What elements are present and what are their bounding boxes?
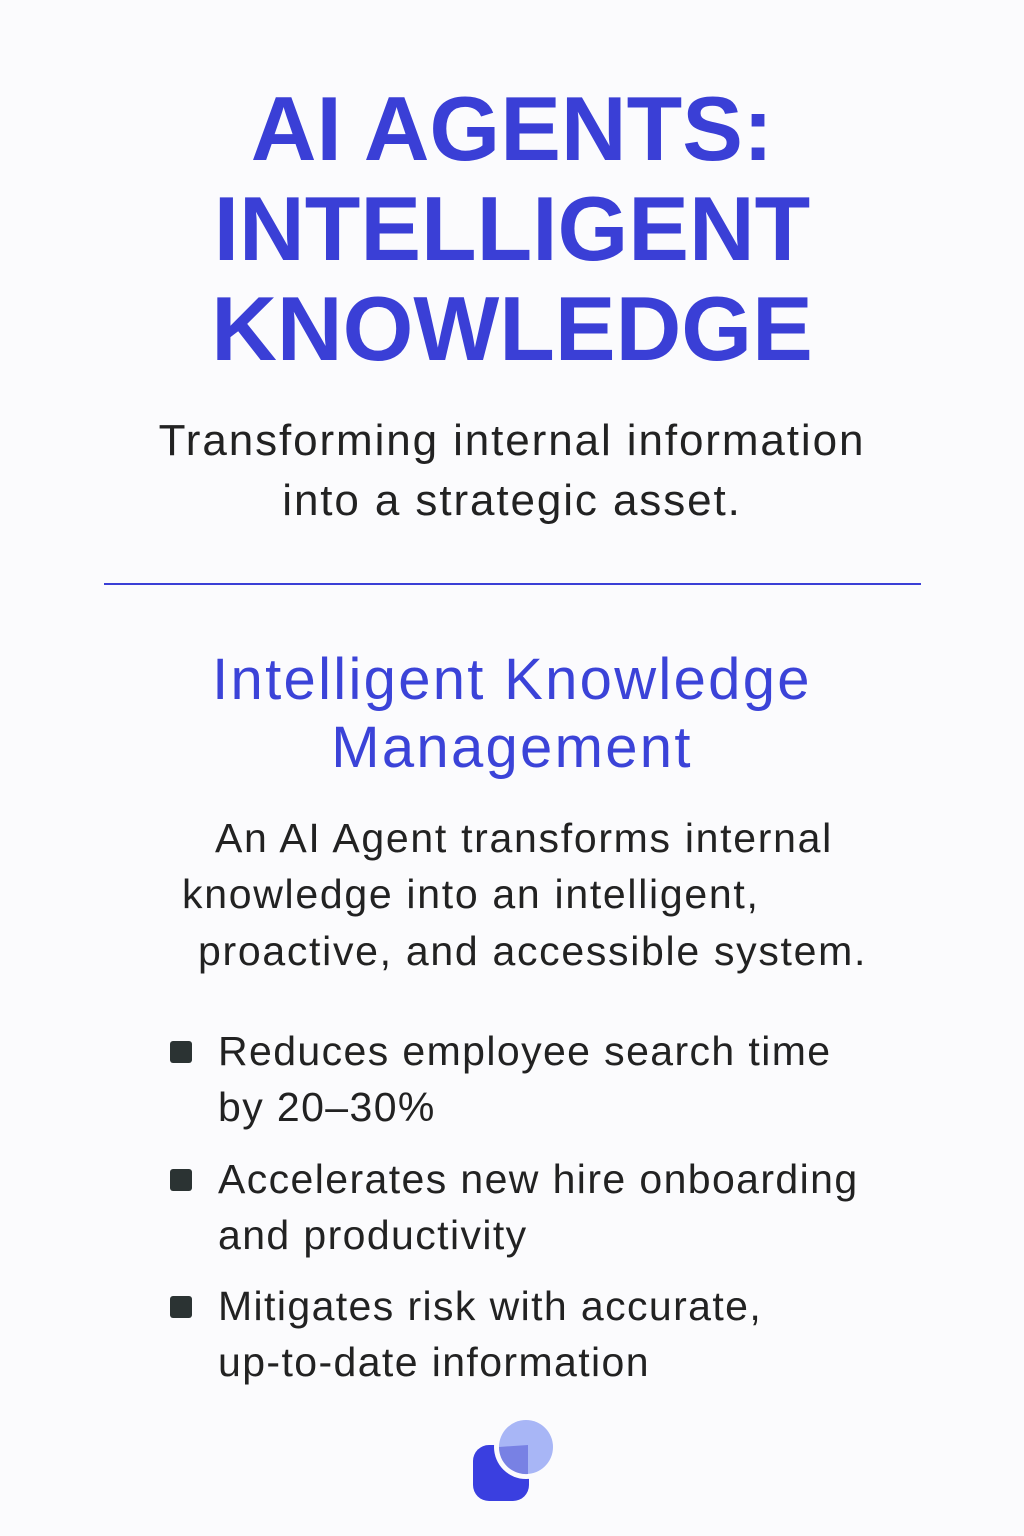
subtitle: Transforming internal information: [159, 416, 865, 465]
subtitle: [159, 416, 865, 525]
section heading: [212, 647, 812, 780]
description paragraph: An AI Agent transforms internal: [215, 815, 833, 861]
bullet 3: up-to-date information: [218, 1339, 650, 1385]
bullet 1: by 20–30%: [218, 1084, 436, 1130]
bullet 1: [170, 1028, 831, 1130]
bullet 1: Reduces employee search time: [218, 1028, 831, 1074]
title: AI AGENTS:: [251, 79, 773, 180]
bullet 2: [170, 1156, 859, 1258]
icon: logo: [473, 1420, 553, 1501]
description paragraph: [182, 815, 867, 974]
subtitle: into a strategic asset.: [282, 476, 742, 525]
bullet 2: and productivity: [218, 1212, 528, 1258]
section heading: Intelligent Knowledge: [212, 647, 812, 712]
title: INTELLIGENT: [214, 179, 810, 280]
title: [211, 79, 813, 380]
bullet 2: Accelerates new hire onboarding: [218, 1156, 859, 1202]
description paragraph: knowledge into an intelligent,: [182, 871, 760, 917]
bullet 3: [170, 1283, 762, 1385]
section heading: Management: [331, 715, 693, 780]
bullet 3: Mitigates risk with accurate,: [218, 1283, 762, 1329]
title: KNOWLEDGE: [211, 279, 813, 380]
description paragraph: proactive, and accessible system.: [198, 928, 867, 974]
